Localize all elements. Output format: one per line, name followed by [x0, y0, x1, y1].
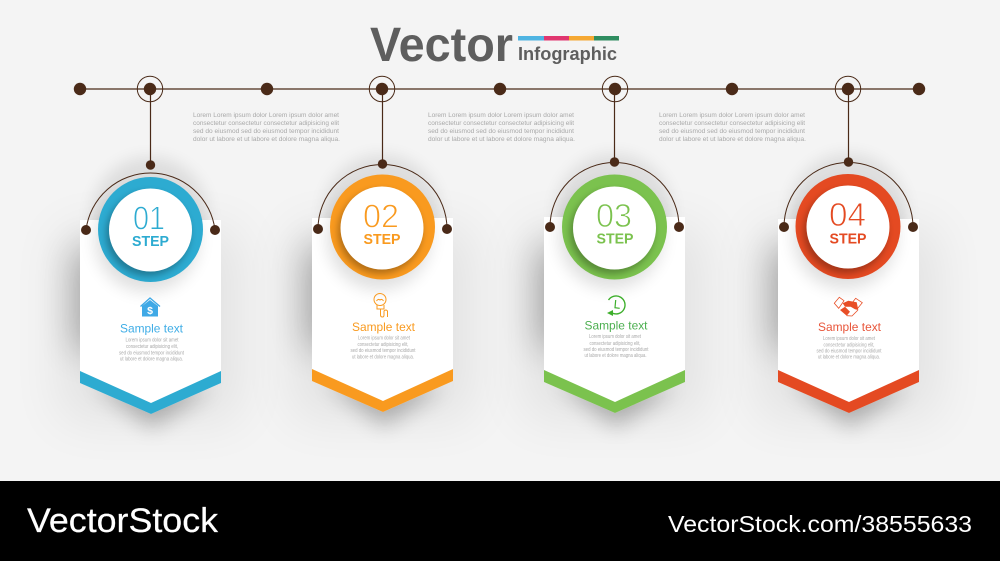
panel: step 2: consectetur adipisicing elit,	[358, 342, 409, 348]
description text 1: consectetur consectetur consectetur adipisicing elit	[193, 120, 339, 127]
title: Infographic	[518, 44, 617, 64]
footer url: VectorStock.com/38555633	[668, 511, 972, 537]
description text 2: consectetur consectetur consectetur adipisicing elit	[428, 120, 574, 127]
panel: step 1: sed do eiusmod tempor incididunt	[119, 350, 184, 356]
description text 1: Lorem Lorem ipsum dolor Lorem ipsum dolor amet	[193, 112, 339, 119]
sample text: Sample text	[352, 320, 416, 334]
panel: step 2: 02	[363, 198, 399, 234]
panel: step 1: consectetur adipisicing elit,	[126, 344, 178, 350]
chevron band	[544, 370, 685, 413]
panel: step 1: ut labore et dolore magna aliqua.	[120, 356, 183, 362]
title: Vector	[370, 19, 513, 72]
icon: clock	[607, 296, 625, 316]
panel: step 4: sed do eiusmod tempor incididunt	[816, 348, 882, 354]
description text 3: consectetur consectetur consectetur adipisicing elit	[659, 120, 805, 127]
footer bar	[0, 481, 1000, 561]
chevron band	[80, 371, 221, 414]
panel: step 2: STEP	[364, 231, 400, 248]
description text 1: sed do eiusmod sed do eiusmod tempor incididunt	[193, 128, 339, 135]
panel: step 4: STEP	[830, 230, 866, 248]
panel: step 1: Lorem ipsum dolor sit amet	[126, 338, 179, 344]
panel: step 2: ut labore et dolore magna aliqua.	[352, 354, 414, 360]
panel: step 3: sed do eiusmod tempor incididunt	[584, 347, 649, 353]
panel: step 4: 04	[829, 196, 866, 233]
description text 2	[428, 112, 575, 143]
icon: house with dollar: $	[147, 305, 153, 317]
panel: step 3: consectetur adipisicing elit,	[590, 341, 641, 347]
icon: light bulb	[374, 294, 388, 317]
description text 1	[193, 112, 340, 143]
panel: step 1	[60, 89, 240, 428]
step badge	[796, 174, 900, 279]
description text 2: Lorem Lorem ipsum dolor Lorem ipsum dolor amet	[428, 112, 574, 119]
description text 2: dolor ut labore et ut labore et dolore magna aliqua.	[428, 136, 575, 143]
chevron band	[778, 370, 919, 413]
panel: step 1: STEP	[132, 233, 169, 250]
description text 3	[659, 112, 806, 143]
panel: step 4: Lorem ipsum dolor sit amet	[823, 336, 875, 342]
panel: step 4: consectetur adipisicing elit,	[824, 342, 875, 348]
sample text: Sample text	[818, 320, 882, 334]
description text 3: sed do eiusmod sed do eiusmod tempor incididunt	[659, 128, 805, 135]
description text 3: dolor ut labore et ut labore et dolore magna aliqua.	[659, 136, 806, 143]
step badge	[562, 174, 667, 280]
chevron band	[312, 369, 453, 412]
description text 1: dolor ut labore et ut labore et dolore magna aliqua.	[193, 136, 340, 143]
sample text: Sample text	[584, 318, 648, 332]
icon: handshake	[834, 297, 862, 316]
title	[370, 19, 619, 72]
panel: step 3: 03	[596, 197, 632, 234]
step badge	[330, 174, 435, 280]
panel: step 3: STEP	[596, 230, 634, 248]
footer logo: VectorStock	[27, 502, 219, 540]
icon: house with dollar	[140, 298, 160, 317]
panel: step 2: Lorem ipsum dolor sit amet	[358, 336, 410, 342]
timeline	[74, 76, 925, 102]
panel: step 3: Lorem ipsum dolor sit amet	[589, 334, 641, 340]
panel: step 2	[292, 89, 472, 426]
panel: step 2: sed do eiusmod tempor incididunt	[350, 348, 416, 354]
description text 3: Lorem Lorem ipsum dolor Lorem ipsum dolor amet	[659, 112, 805, 119]
description text 2: sed do eiusmod sed do eiusmod tempor incididunt	[428, 128, 574, 135]
panel: step 3: ut labore et dolore magna aliqua.	[584, 353, 647, 359]
sample text: Sample text	[120, 322, 184, 336]
panel: step 3	[524, 89, 704, 427]
panel: step 4	[758, 89, 938, 427]
panel: step 1: 01	[133, 200, 165, 236]
step badge	[98, 177, 203, 282]
panel: step 4: ut labore et dolore magna aliqua.	[818, 354, 880, 360]
